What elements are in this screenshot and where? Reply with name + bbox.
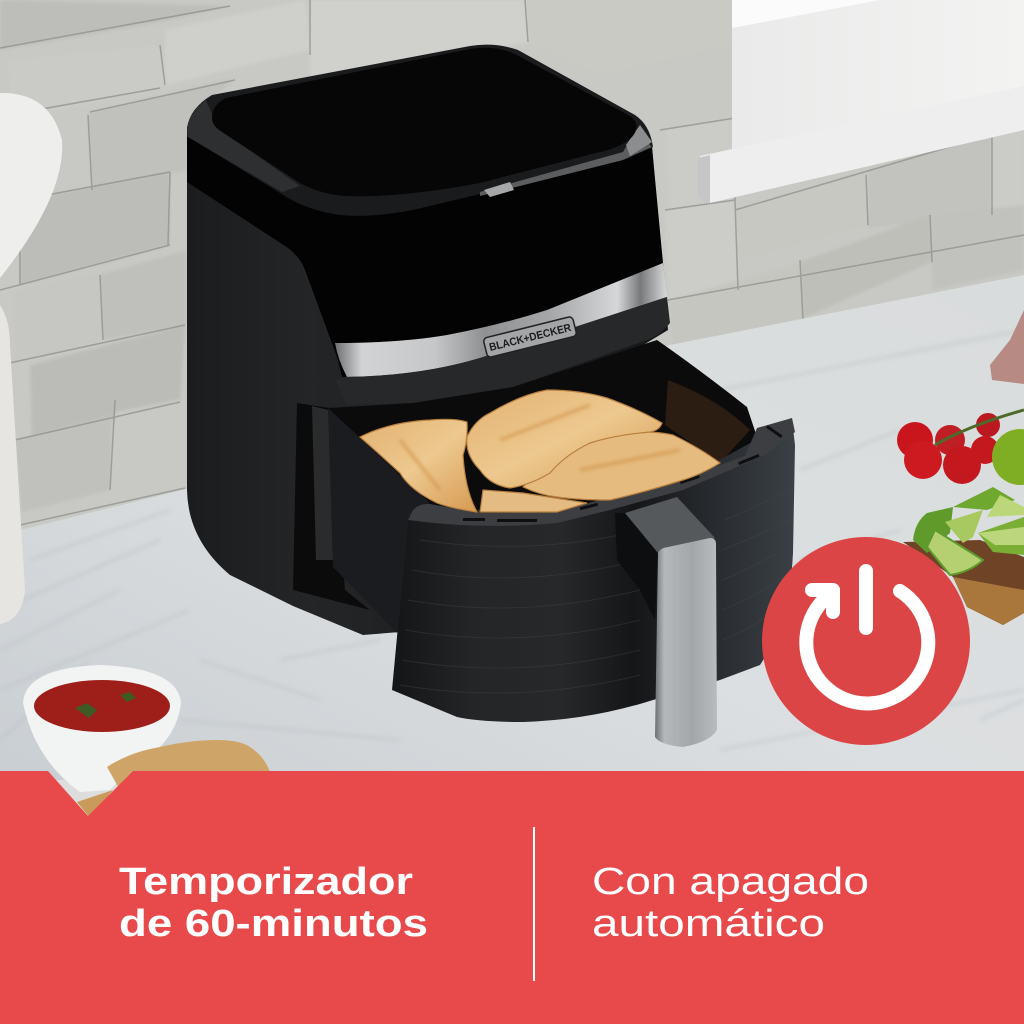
tomatoes on vine (897, 410, 1024, 484)
brushed dark lip (335, 297, 670, 405)
empanadas in basket (360, 390, 720, 512)
icon: power timer badge (762, 537, 970, 745)
basket left side (328, 408, 430, 633)
background: stone wall (0, 0, 1024, 540)
divider (533, 827, 535, 981)
warm reflection inside basket (665, 380, 750, 463)
fryer body (187, 127, 668, 635)
handle support (615, 513, 658, 620)
interior cavity (293, 403, 370, 610)
brand badge: BLACK+DECKER (488, 322, 572, 354)
rim slots (463, 425, 783, 522)
cutting board with lime wedges (903, 487, 1024, 625)
red banner with notch (0, 771, 1024, 1024)
lid rim (187, 45, 653, 216)
white spoon and canister at left (0, 93, 62, 624)
marble countertop (0, 275, 1024, 780)
glossy front panel (187, 137, 667, 380)
text: auto shut-off: Con apagado (592, 861, 869, 903)
lime and towel (990, 310, 1024, 485)
empanada on counter (77, 740, 270, 818)
lid top surface (212, 48, 637, 196)
basket interior (328, 340, 757, 525)
heading: timer: Temporizador (119, 861, 413, 903)
text: auto shut-off: automático (592, 903, 825, 945)
basket front (392, 420, 795, 722)
handle neck (625, 497, 715, 553)
handle grip (655, 538, 717, 747)
air fryer (187, 45, 795, 747)
chrome trim band (335, 263, 667, 377)
text: auto shut-off (592, 861, 869, 945)
heading: timer: de 60-minutos (119, 903, 428, 945)
brushed texture (400, 490, 790, 693)
heading: timer (119, 861, 428, 945)
basket rim (408, 418, 795, 526)
window sill (698, 0, 1024, 203)
salsa bowl (23, 665, 181, 792)
